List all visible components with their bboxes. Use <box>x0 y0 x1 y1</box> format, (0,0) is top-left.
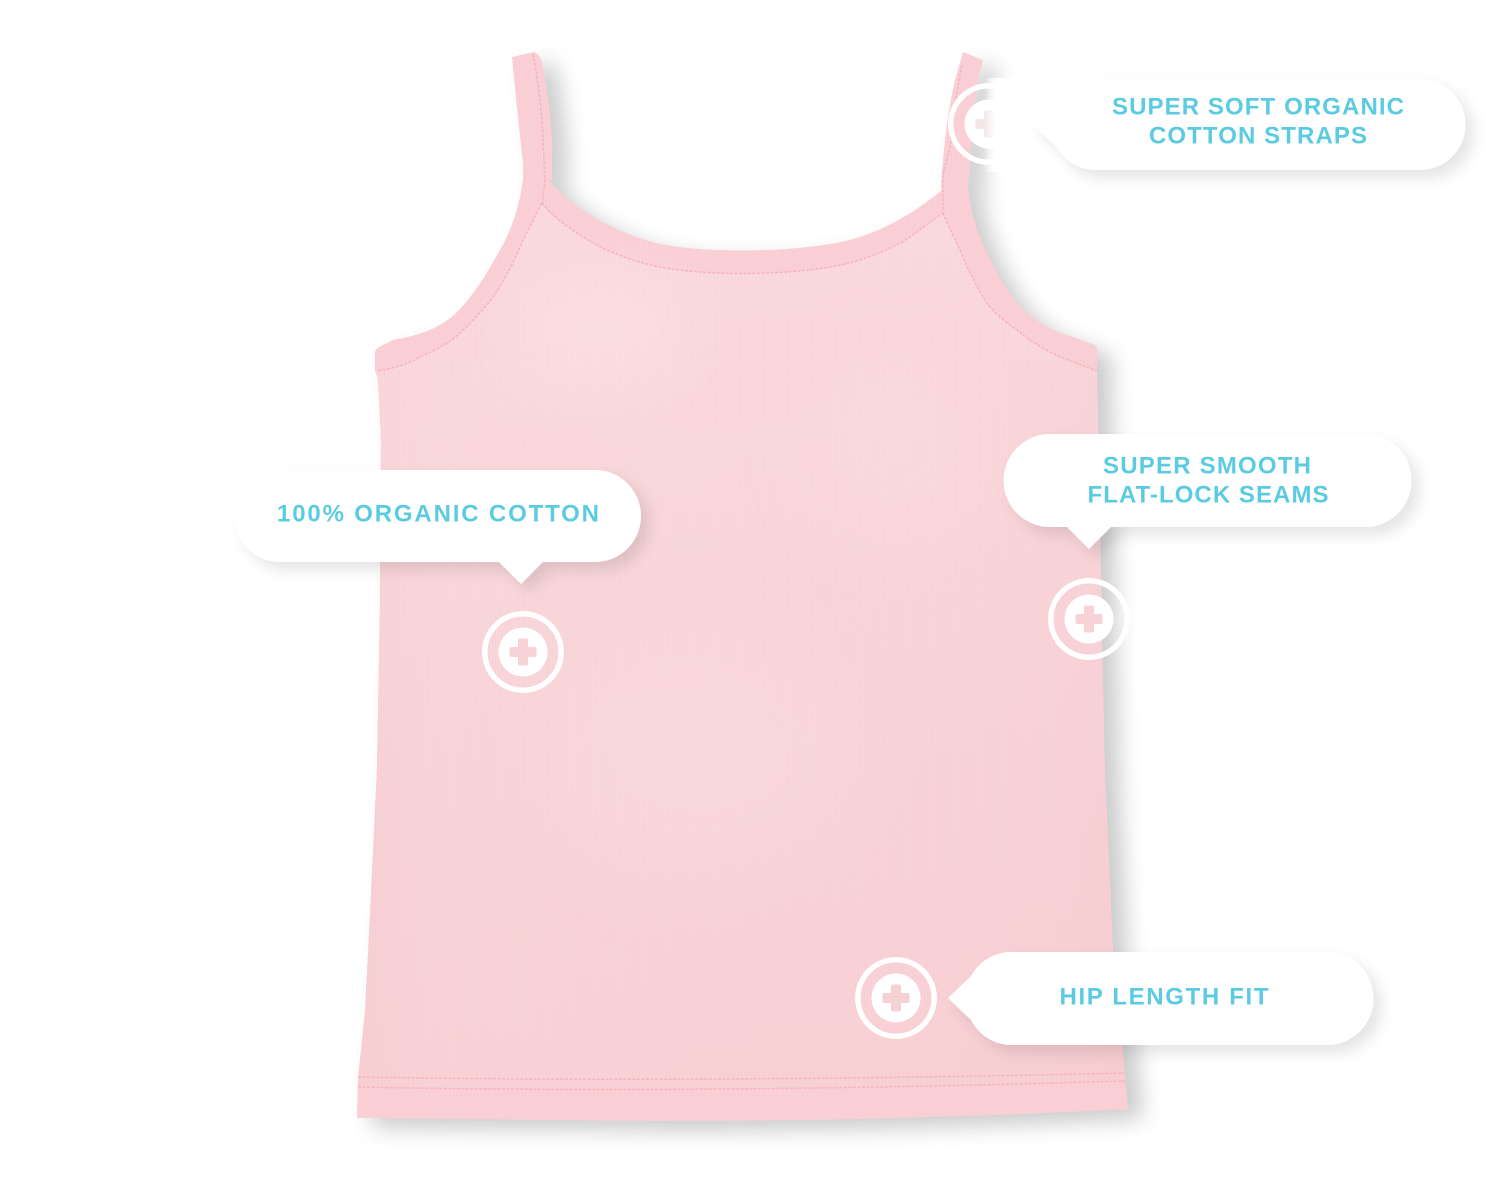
callout: super soft organic cotton straps <box>1030 79 1466 170</box>
callout: super smooth flat-lock seams: SUPER SMOOTH <box>1103 452 1311 480</box>
marker: flat-lock seams <box>1051 581 1127 657</box>
strap marker fade into callout <box>984 78 1044 172</box>
callout: 100% organic cotton <box>234 470 641 584</box>
marker: straps <box>951 86 1027 162</box>
infographic: camisole feature callouts <box>245 52 1476 1141</box>
callout: hip length fit <box>948 952 1374 1045</box>
callout: 100% organic cotton: 100% ORGANIC COTTON <box>277 500 599 528</box>
callout: super soft organic cotton straps: SUPER SOFT ORGANIC <box>1112 94 1404 120</box>
body panel <box>350 203 1140 1089</box>
marker: hip length <box>858 960 934 1036</box>
marker: organic cotton <box>485 614 561 690</box>
stitching <box>358 54 1125 1089</box>
camisole garment <box>350 40 1143 1131</box>
fabric highlights <box>510 275 990 880</box>
callout: super smooth flat-lock seams: FLAT-LOCK SEAMS <box>1088 482 1328 508</box>
callout: super soft organic cotton straps: COTTON STRAPS <box>1149 122 1367 150</box>
callout: hip length fit: HIP LENGTH FIT <box>1060 984 1269 1010</box>
callout: super smooth flat-lock seams <box>1004 434 1412 549</box>
